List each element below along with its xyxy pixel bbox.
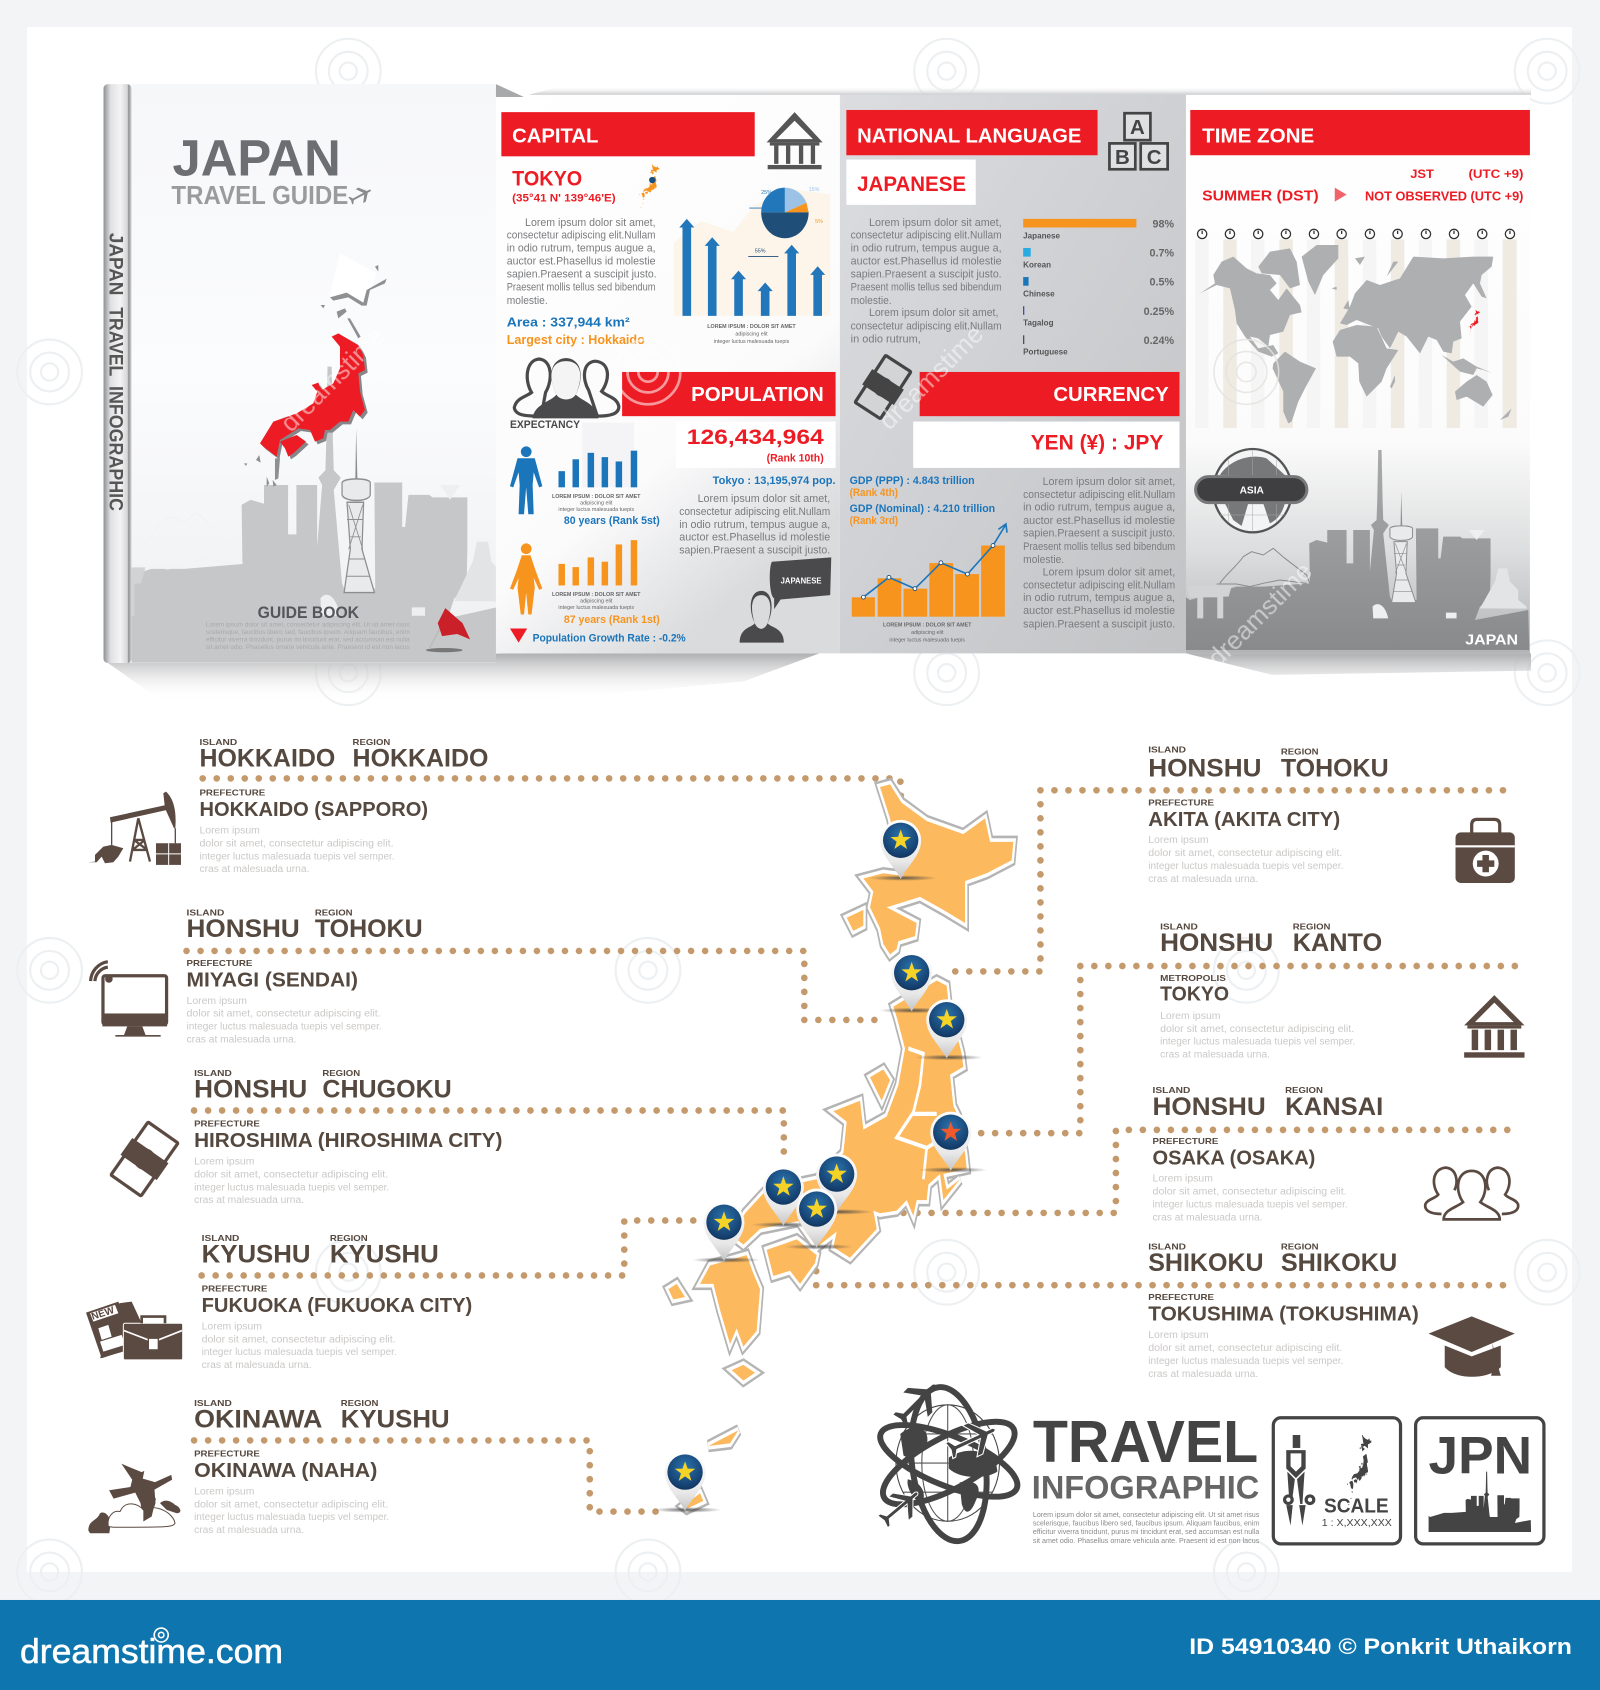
- map pin: okinawa: [653, 1452, 722, 1513]
- currency text block: Praesent mollis tellus sed bibendum: [1023, 541, 1175, 553]
- spine title: JAPAN: [104, 233, 126, 295]
- world map: [1200, 245, 1512, 423]
- panel skyline: [1185, 450, 1529, 650]
- language bar chart: 0.5%: [1150, 277, 1175, 289]
- location: hokkaido: ISLAND: [199, 737, 237, 747]
- location: hiroshima: REGION: [322, 1068, 360, 1078]
- location: okinawa: OKINAWA: [194, 1406, 322, 1433]
- logo description: Lorem ipsum dolor sit amet, consectetur adipiscing elit. Ut sit amet risus: [1033, 1510, 1260, 1519]
- cover description: sit amet odio. Phasellus ornare vehicula ante. Praesent id est non lacus: [206, 644, 410, 651]
- female bar chart: adipiscing elit: [580, 599, 613, 605]
- capital text block: Lorem ipsum dolor sit amet,: [525, 217, 656, 229]
- location: fukuoka: KYUSHU: [330, 1242, 439, 1269]
- language text block: Lorem ipsum dolor sit amet,: [869, 307, 998, 319]
- location: akita: cras at malesuada urna.: [1148, 874, 1258, 885]
- cover description: efficitur viverra tincidunt, purus mi tincidunt erat, sed accumsan est nulla: [206, 636, 410, 643]
- capital text block: sapien.Praesent a suscipit justo.: [507, 269, 657, 281]
- icon: speaking head: [740, 591, 784, 643]
- location: osaka: [1153, 1085, 1383, 1223]
- location: hokkaido: HOKKAIDO: [353, 746, 488, 773]
- location: okinawa: KYUSHU: [341, 1406, 450, 1433]
- location: akita: HONSHU: [1148, 755, 1261, 782]
- japan highlight on world map: [1468, 310, 1480, 334]
- location: miyagi: cras at malesuada urna.: [187, 1035, 297, 1046]
- currency text block: Lorem ipsum dolor sit amet,: [1043, 567, 1175, 579]
- location: fukuoka: cras at malesuada urna.: [202, 1360, 312, 1371]
- scale ratio: 1 : X,XXX,XXX: [1322, 1518, 1392, 1529]
- location: miyagi: dolor sit amet, consectetur adipiscing elit.: [187, 1009, 381, 1020]
- location: tokushima: dolor sit amet, consectetur adipiscing elit.: [1148, 1343, 1342, 1354]
- female bar chart: 87 years (Rank 1st): [564, 614, 660, 626]
- location: hokkaido: REGION: [353, 737, 390, 747]
- location: tokyo: HONSHU: [1160, 930, 1273, 957]
- gdp stats: GDP (Nominal) : 4.210 trillion: [850, 503, 995, 515]
- currency text block: Lorem ipsum dolor sit amet,: [1043, 476, 1175, 488]
- location: okinawa: Lorem ipsum: [194, 1486, 254, 1497]
- language bar chart: 0.24%: [1144, 335, 1175, 347]
- gdp chart: [852, 524, 1007, 643]
- location: okinawa: cras at malesuada urna.: [194, 1525, 304, 1536]
- gdp chart: integer luctus malesuada tuepis: [889, 637, 965, 643]
- map pin: tokyo: [918, 1112, 987, 1173]
- spine title: INFOGRAPHIC: [104, 386, 126, 511]
- location: okinawa: OKINAWA (NAHA): [194, 1459, 377, 1482]
- location: hokkaido: PREFECTURE: [199, 788, 266, 798]
- location: fukuoka: [202, 1233, 472, 1371]
- watermark overlay: dreamstime: [276, 322, 391, 438]
- icon: money: [853, 354, 913, 420]
- population number: [676, 422, 836, 468]
- icon: first aid kit: [1456, 819, 1515, 883]
- panel: national language and currency: [840, 95, 1186, 653]
- capital text block: auctor est.Phasellus id molestie: [507, 255, 656, 267]
- location: miyagi: integer luctus malesuada tuepis vel semper.: [187, 1022, 382, 1033]
- location: tokyo: METROPOLIS: [1160, 973, 1226, 983]
- male bar chart: 80 years (Rank 5st): [564, 515, 660, 527]
- largest city stat: Largest city : Hokkaido: [507, 332, 645, 347]
- language text block: Praesent mollis tellus sed bibendum: [851, 282, 1002, 294]
- language text block: consectetur adipiscing elit.Nullam: [851, 230, 1002, 242]
- female bar chart: LOREM IPSUM : DOLOR SIT AMET: [552, 592, 641, 598]
- icon: bank: [767, 112, 823, 169]
- location: fukuoka: ISLAND: [202, 1233, 239, 1243]
- time zone details: (UTC +9): [1468, 167, 1523, 181]
- icon: computer: [91, 962, 167, 1037]
- icon: cover plane: [347, 183, 375, 208]
- location: tokyo: KANTO: [1293, 930, 1382, 957]
- location: hiroshima: dolor sit amet, consectetur adipiscing elit.: [194, 1169, 388, 1180]
- currency name: YEN (¥) : JPY: [1031, 430, 1164, 455]
- location: osaka: REGION: [1285, 1085, 1323, 1095]
- icon: globe with orbiting planes: [872, 1373, 1026, 1546]
- location: tokushima: PREFECTURE: [1148, 1292, 1214, 1302]
- capital banner: CAPITAL: [512, 124, 598, 147]
- location: osaka: Lorem ipsum: [1153, 1174, 1213, 1185]
- area stat: Area : 337,944 km²: [507, 315, 630, 330]
- location: hiroshima: Lorem ipsum: [194, 1156, 254, 1167]
- location: osaka: cras at malesuada urna.: [1153, 1212, 1263, 1223]
- footer bar: [0, 1600, 1600, 1690]
- location: akita: PREFECTURE: [1148, 797, 1214, 807]
- expectancy label: EXPECTANCY: [510, 419, 580, 431]
- icon: plane and clouds: [88, 1463, 180, 1533]
- gdp chart: adipiscing elit: [911, 630, 944, 636]
- logo description: scelerisque, faucibus libero sed, faucibus ipsum. Aliquam faucibus, enim: [1033, 1519, 1259, 1528]
- icon: bank building: [1464, 995, 1525, 1058]
- location: okinawa: REGION: [341, 1398, 378, 1408]
- female bar chart: integer luctus malesuada tuepis: [558, 605, 634, 611]
- currency text block: in odio rutrum, tempus augue a,: [1023, 592, 1175, 604]
- capital banner: [501, 112, 755, 156]
- pie chart: 55%: [755, 248, 766, 254]
- pie chart: 15%: [809, 187, 820, 193]
- location: hokkaido: cras at malesuada urna.: [199, 864, 309, 875]
- location: tokyo: integer luctus malesuada tuepis vel semper.: [1160, 1037, 1355, 1048]
- map pin: osaka: [804, 1154, 873, 1215]
- location: tokushima: integer luctus malesuada tuepis vel semper.: [1148, 1356, 1343, 1367]
- language bar chart: 98%: [1153, 218, 1175, 230]
- time zone details: [1202, 167, 1523, 205]
- japan label: JAPAN: [1465, 632, 1518, 649]
- capital text block: in odio rutrum, tempus augue a,: [507, 243, 656, 255]
- currency text block: consectetur adipiscing elit.Nullam: [1023, 489, 1175, 501]
- currency text block: sapien.Praesent a suscipit justo.: [1023, 528, 1175, 540]
- male bar chart: adipiscing elit: [580, 501, 613, 507]
- currency text block: molestie.: [1023, 554, 1064, 566]
- pie chart: 25%: [761, 190, 772, 196]
- cover description: scelerisque, faucibus libero sed, faucibus ipsum. Aliquam faucibus, enim: [206, 629, 410, 636]
- chart caption: integer luctus malesuada tuepis: [714, 339, 790, 345]
- location: hokkaido: [199, 737, 488, 875]
- location: okinawa: PREFECTURE: [194, 1449, 260, 1459]
- currency name: [913, 422, 1180, 468]
- location: osaka: integer luctus malesuada tuepis vel semper.: [1153, 1200, 1348, 1211]
- location: hiroshima: ISLAND: [194, 1068, 232, 1078]
- male bar chart: integer luctus malesuada tuepis: [558, 507, 634, 513]
- capital text block: molestie.: [507, 295, 548, 307]
- icon: red flag: [426, 608, 470, 652]
- location: hiroshima: [194, 1068, 502, 1206]
- location: miyagi: Lorem ipsum: [187, 996, 247, 1007]
- chart caption: adipiscing elit: [735, 331, 768, 337]
- location: akita: integer luctus malesuada tuepis vel semper.: [1148, 861, 1343, 872]
- cover guide book label: GUIDE BOOK: [258, 604, 359, 622]
- language text block: molestie.: [851, 295, 892, 307]
- location: tokushima: cras at malesuada urna.: [1148, 1369, 1258, 1380]
- location: tokyo: [1160, 921, 1382, 1061]
- growth rate stat: Population Growth Rate : -0.2%: [533, 632, 686, 644]
- time zone banner: [1190, 110, 1530, 155]
- icon: mini japan map: [639, 164, 659, 208]
- scale box: [1273, 1418, 1401, 1544]
- gdp stats: (Rank 4th): [850, 487, 898, 499]
- language bar chart: 0.7%: [1150, 248, 1175, 260]
- capital text block: Praesent mollis tellus sed bibendum: [507, 282, 656, 294]
- pie chart: [748, 187, 823, 257]
- location: hokkaido: Lorem ipsum: [199, 825, 260, 836]
- male bar chart: [510, 423, 660, 527]
- time zone banner: TIME ZONE: [1202, 124, 1314, 147]
- jpn label: JPN: [1429, 1426, 1532, 1485]
- language name: [846, 160, 976, 205]
- location: akita: dolor sit amet, consectetur adipiscing elit.: [1148, 848, 1342, 859]
- gdp chart: LOREM IPSUM : DOLOR SIT AMET: [883, 622, 972, 628]
- population number: 126,434,964: [687, 424, 824, 449]
- icon: japan silhouette: [1347, 1435, 1371, 1505]
- location: okinawa: integer luctus malesuada tuepis vel semper.: [194, 1512, 389, 1523]
- gdp stats: GDP (PPP) : 4.843 trillion: [850, 475, 975, 487]
- cover skyline: [132, 366, 496, 663]
- location: hokkaido: HOKKAIDO: [199, 746, 335, 773]
- location: osaka: ISLAND: [1153, 1085, 1190, 1095]
- location: akita: AKITA (AKITA CITY): [1148, 808, 1340, 831]
- jpn box: [1416, 1418, 1544, 1544]
- location: fukuoka: integer luctus malesuada tuepis vel semper.: [202, 1347, 397, 1358]
- icon: oil pump: [88, 792, 181, 865]
- population number: (Rank 10th): [767, 452, 824, 464]
- chart caption: [707, 324, 796, 345]
- logo subtitle: INFOGRAPHIC: [1032, 1470, 1259, 1506]
- travel infographic logo: [872, 1373, 1260, 1546]
- icon: newspaper and briefcase: NEW: [90, 1305, 116, 1323]
- currency text block: auctor est.Phasellus id molestie: [1023, 515, 1175, 527]
- location: hokkaido: dolor sit amet, consectetur adipiscing elit.: [199, 838, 394, 849]
- location: fukuoka: KYUSHU: [202, 1242, 311, 1269]
- location: hiroshima: cras at malesuada urna.: [194, 1195, 304, 1206]
- icon: abc blocks: B: [1115, 146, 1130, 169]
- location: osaka: OSAKA (OSAKA): [1153, 1146, 1315, 1169]
- location: hiroshima: HIROSHIMA (HIROSHIMA CITY): [194, 1129, 502, 1152]
- guide book cover: [87, 84, 1531, 701]
- logo description: efficitur viverra tincidunt, purus mi tincidunt erat, sed accumsan est nulla: [1033, 1527, 1260, 1536]
- currency text block: in odio rutrum, tempus augue a,: [1023, 502, 1175, 514]
- scale label: SCALE: [1324, 1496, 1389, 1518]
- location: osaka: PREFECTURE: [1153, 1136, 1219, 1146]
- population text block: sapien.Praesent a suscipit justo.: [679, 545, 830, 557]
- currency text block: consectetur adipiscing elit.Nullam: [1023, 580, 1175, 592]
- location: osaka: HONSHU: [1153, 1094, 1266, 1121]
- language bar chart: 0.25%: [1144, 306, 1175, 318]
- panel: capital and population: [496, 84, 840, 653]
- location: hokkaido: HOKKAIDO (SAPPORO): [199, 798, 428, 821]
- time zone stripes and clocks: [1195, 229, 1517, 428]
- icon: people outline: [1425, 1168, 1518, 1219]
- brochure: [496, 84, 1530, 653]
- icon: abc blocks: A: [1130, 116, 1145, 139]
- population text block: in odio rutrum, tempus augue a,: [679, 519, 830, 531]
- icon: graduation cap: [1429, 1316, 1515, 1377]
- location: tokyo: dolor sit amet, consectetur adipiscing elit.: [1160, 1024, 1354, 1035]
- location: osaka: dolor sit amet, consectetur adipiscing elit.: [1153, 1187, 1347, 1198]
- map pin: fukuoka: [692, 1202, 761, 1263]
- cover description: [206, 621, 410, 651]
- population text block: Lorem ipsum dolor sit amet,: [698, 493, 830, 505]
- language text block: auctor est.Phasellus id molestie: [851, 255, 1002, 267]
- language text block: [851, 217, 1002, 346]
- location: tokyo: cras at malesuada urna.: [1160, 1050, 1270, 1061]
- time zone details: SUMMER (DST): [1202, 188, 1319, 205]
- location: miyagi: HONSHU: [187, 916, 300, 943]
- map pin: tokushima: [784, 1189, 853, 1250]
- population banner: [622, 372, 836, 416]
- language bar chart: Japanese: [1023, 231, 1061, 240]
- icon: abc blocks: [1109, 113, 1168, 169]
- map pin: hokkaido: [868, 820, 937, 881]
- location: hiroshima: PREFECTURE: [194, 1119, 260, 1129]
- currency banner: CURRENCY: [1053, 383, 1169, 406]
- map of japan: [668, 784, 1013, 1509]
- language bar chart: [1023, 218, 1175, 357]
- cover subtitle: TRAVEL GUIDE: [171, 182, 348, 210]
- language text block: sapien.Praesent a suscipit justo.: [851, 269, 1002, 281]
- location: fukuoka: PREFECTURE: [202, 1284, 268, 1294]
- location: hiroshima: HONSHU: [194, 1077, 307, 1104]
- language banner: NATIONAL LANGUAGE: [857, 124, 1081, 147]
- cover map of japan: [244, 253, 387, 487]
- logo description: sit amet odio. Phasellus ornare vehicula ante. Praesent id est non lacus: [1033, 1536, 1260, 1545]
- location: fukuoka: Lorem ipsum: [202, 1321, 262, 1332]
- location: tokushima: REGION: [1281, 1242, 1319, 1252]
- location: tokyo: TOKYO: [1160, 983, 1229, 1006]
- location: akita: Lorem ipsum: [1148, 835, 1209, 846]
- location: miyagi: ISLAND: [187, 907, 224, 917]
- map pin: hiroshima: [751, 1167, 820, 1228]
- location: osaka: KANSAI: [1285, 1094, 1383, 1121]
- location: hiroshima: integer luctus malesuada tuepis vel semper.: [194, 1182, 389, 1193]
- location: tokushima: TOKUSHIMA (TOKUSHIMA): [1148, 1303, 1419, 1326]
- population text block: consectetur adipiscing elit.Nullam: [679, 506, 830, 518]
- location: tokushima: Lorem ipsum: [1148, 1330, 1209, 1341]
- icon: money bundle: [109, 1121, 180, 1197]
- time zone details: JST: [1410, 167, 1434, 181]
- currency banner: [920, 372, 1180, 416]
- currency text block: sapien.Praesent a suscipit justo.: [1023, 618, 1175, 630]
- location: akita: REGION: [1281, 747, 1319, 757]
- time zone details: NOT OBSERVED (UTC +9): [1365, 189, 1523, 204]
- language bar chart: Chinese: [1023, 289, 1055, 298]
- watermark overlay: dreamstime: [1203, 557, 1318, 673]
- icon: asia globe: [1196, 449, 1307, 532]
- language text block: in odio rutrum,: [851, 334, 921, 346]
- capital name: TOKYO: [512, 165, 582, 190]
- cover description: Lorem ipsum dolor sit amet, consectetur adipiscing elit. Ut sit amet risus: [206, 621, 410, 628]
- language text block: consectetur adipiscing elit.Nullam: [851, 321, 1002, 333]
- language text block: Lorem ipsum dolor sit amet,: [869, 217, 1002, 229]
- arrow bar chart: [674, 187, 830, 345]
- dotted connector lines: [187, 778, 1515, 1512]
- spine title: [104, 233, 126, 511]
- capital text block: consectetur adipiscing elit.Nullam: [507, 230, 656, 242]
- language banner: [846, 110, 1098, 155]
- location: fukuoka: dolor sit amet, consectetur adipiscing elit.: [202, 1334, 396, 1345]
- location: okinawa: dolor sit amet, consectetur adipiscing elit.: [194, 1499, 388, 1510]
- population text block: auctor est.Phasellus id molestie: [679, 532, 830, 544]
- icon: abc blocks: C: [1147, 146, 1162, 169]
- location: hiroshima: CHUGOKU: [322, 1077, 452, 1104]
- location: tokushima: [1148, 1242, 1419, 1380]
- speech bubble: [770, 557, 831, 609]
- tokyo population: Tokyo : 13,195,974 pop.: [713, 475, 836, 487]
- location: fukuoka: REGION: [330, 1233, 368, 1243]
- location: tokushima: ISLAND: [1148, 1242, 1186, 1252]
- watermark overlay: [276, 320, 1318, 673]
- logo description: [1033, 1510, 1260, 1545]
- language bar chart: Portuguese: [1023, 348, 1068, 357]
- location: akita: TOHOKU: [1281, 755, 1389, 782]
- language name: JAPANESE: [857, 171, 966, 196]
- pie chart: 5%: [815, 219, 823, 225]
- location: miyagi: [187, 907, 423, 1046]
- footer logo: dreamstime.com: [20, 1633, 283, 1671]
- chart caption: LOREM IPSUM : DOLOR SIT AMET: [707, 324, 796, 330]
- footer credit: ID 54910340 © Ponkrit Uthaikorn: [1189, 1634, 1572, 1659]
- capital coordinates: (35°41 N' 139°46'E): [512, 193, 616, 205]
- location: tokushima: SHIKOKU: [1148, 1250, 1264, 1277]
- location: miyagi: REGION: [315, 907, 353, 917]
- location: miyagi: TOHOKU: [315, 916, 423, 943]
- growth rate stat: [510, 629, 686, 644]
- speech bubble: JAPANESE: [781, 576, 822, 585]
- female bar chart: [510, 540, 660, 626]
- location: miyagi: PREFECTURE: [187, 958, 253, 968]
- icon: people: [514, 358, 619, 418]
- icon: skyline: [1429, 1472, 1531, 1532]
- location: okinawa: ISLAND: [194, 1398, 232, 1408]
- cover title: JAPAN: [173, 130, 341, 187]
- icon: newspaper and briefcase: [86, 1302, 183, 1360]
- location: tokyo: ISLAND: [1160, 921, 1198, 931]
- map pin: akita: [879, 952, 948, 1013]
- location: fukuoka: FUKUOKA (FUKUOKA CITY): [202, 1294, 472, 1317]
- spine title: TRAVEL: [104, 307, 126, 376]
- male bar chart: LOREM IPSUM : DOLOR SIT AMET: [552, 494, 641, 500]
- capital text block: [507, 217, 657, 307]
- location: akita: ISLAND: [1148, 745, 1186, 755]
- icon: asia globe: ASIA: [1240, 485, 1264, 496]
- currency text block: [1023, 476, 1175, 630]
- location: okinawa: [194, 1398, 450, 1536]
- location: tokyo: Lorem ipsum: [1160, 1011, 1220, 1022]
- currency text block: auctor est.Phasellus id molestie: [1023, 605, 1175, 617]
- logo title: TRAVEL: [1033, 1408, 1258, 1475]
- watermark overlay: dreamstime: [874, 320, 989, 436]
- gdp stats: (Rank 3rd): [850, 515, 898, 527]
- location: miyagi: MIYAGI (SENDAI): [187, 969, 358, 992]
- language bar chart: Korean: [1023, 260, 1051, 269]
- language text block: in odio rutrum, tempus augue a,: [851, 243, 1002, 255]
- language bar chart: Tagalog: [1023, 319, 1054, 328]
- population banner: POPULATION: [691, 383, 824, 406]
- map pin: miyagi: [914, 999, 983, 1060]
- population text block: [679, 493, 830, 557]
- location: hokkaido: integer luctus malesuada tuepis vel semper.: [199, 851, 395, 862]
- panel: time zone: [1185, 95, 1530, 653]
- location: tokushima: SHIKOKU: [1281, 1250, 1397, 1277]
- location: tokyo: REGION: [1293, 921, 1330, 931]
- gdp stats: [850, 475, 995, 527]
- icon: compass: [1283, 1435, 1315, 1526]
- location: akita: [1148, 745, 1389, 885]
